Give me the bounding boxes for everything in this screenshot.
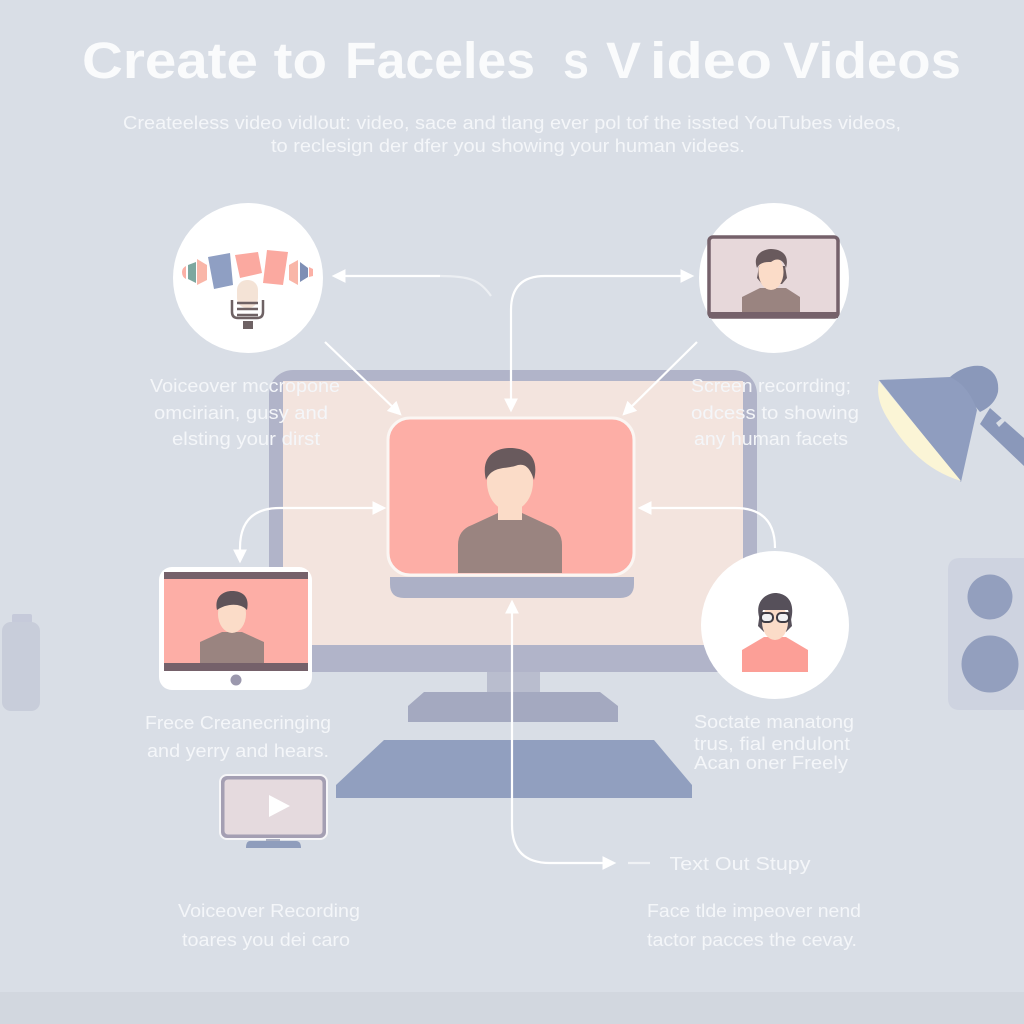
label: free screen recording: and yerry and hears. xyxy=(147,741,329,761)
icon: small play monitor xyxy=(220,775,327,848)
label: text out study: Text Out Stupy xyxy=(670,854,810,874)
microphone xyxy=(232,280,263,329)
label: voiceover recording: toares you dei caro xyxy=(182,930,350,950)
icon circle: presenter with glasses xyxy=(701,551,849,699)
central video screen xyxy=(388,418,634,598)
icon circle: screen recording xyxy=(699,203,849,353)
label: free screen recording: Frece Creanecringing xyxy=(145,713,331,733)
label: free screen recording xyxy=(145,713,331,761)
subtitle: to reclesign der dfer you showing your human videes. xyxy=(271,135,745,156)
label: socrate xyxy=(694,712,854,773)
subtitle xyxy=(123,112,901,156)
label: voiceover microphone: omciriain, gusy and xyxy=(154,403,328,423)
title: Faceles xyxy=(345,32,535,89)
label: voiceover microphone: Voiceover mccropone xyxy=(150,376,340,396)
label: voiceover microphone: elsting your dirst xyxy=(172,429,320,449)
label: voiceover recording xyxy=(178,901,360,950)
label: face tilde: tactor pacces the cevay. xyxy=(647,930,857,950)
label: screen recording xyxy=(691,376,859,449)
icon: desk lamp xyxy=(878,366,1024,482)
icon: tablet with presenter xyxy=(159,567,312,690)
subtitle: Createeless video vidlout: video, sace and tlang ever pol tof the issted YouTubes videos, xyxy=(123,112,901,133)
label: face tilde: Face tlde impeover nend xyxy=(647,901,861,921)
label: screen recording: Screen recorrding; xyxy=(691,376,851,396)
label: screen recording: any human facets xyxy=(694,429,848,449)
label: face tilde xyxy=(647,901,861,950)
icon: bottle xyxy=(2,614,40,711)
title: Videos xyxy=(783,32,961,89)
desktop monitor xyxy=(269,370,757,722)
label: voiceover microphone xyxy=(150,376,340,449)
label: socrate: Acan oner Freely xyxy=(694,753,848,773)
title: Create to xyxy=(82,32,327,89)
label: socrate: Soctate manatong xyxy=(694,712,854,732)
label: screen recording: odcess to showing xyxy=(691,403,859,423)
label: voiceover recording: Voiceover Recording xyxy=(178,901,360,921)
title: V xyxy=(606,32,641,89)
keyboard xyxy=(336,740,692,798)
title: ideo xyxy=(650,32,772,89)
presenter figure xyxy=(458,448,562,573)
title: s xyxy=(563,32,589,89)
arrows xyxy=(240,276,775,863)
label: socrate: trus, fial endulont xyxy=(694,734,850,754)
title xyxy=(82,32,961,89)
icon: speaker xyxy=(948,558,1024,710)
icon circle: voiceover microphone xyxy=(173,203,323,353)
